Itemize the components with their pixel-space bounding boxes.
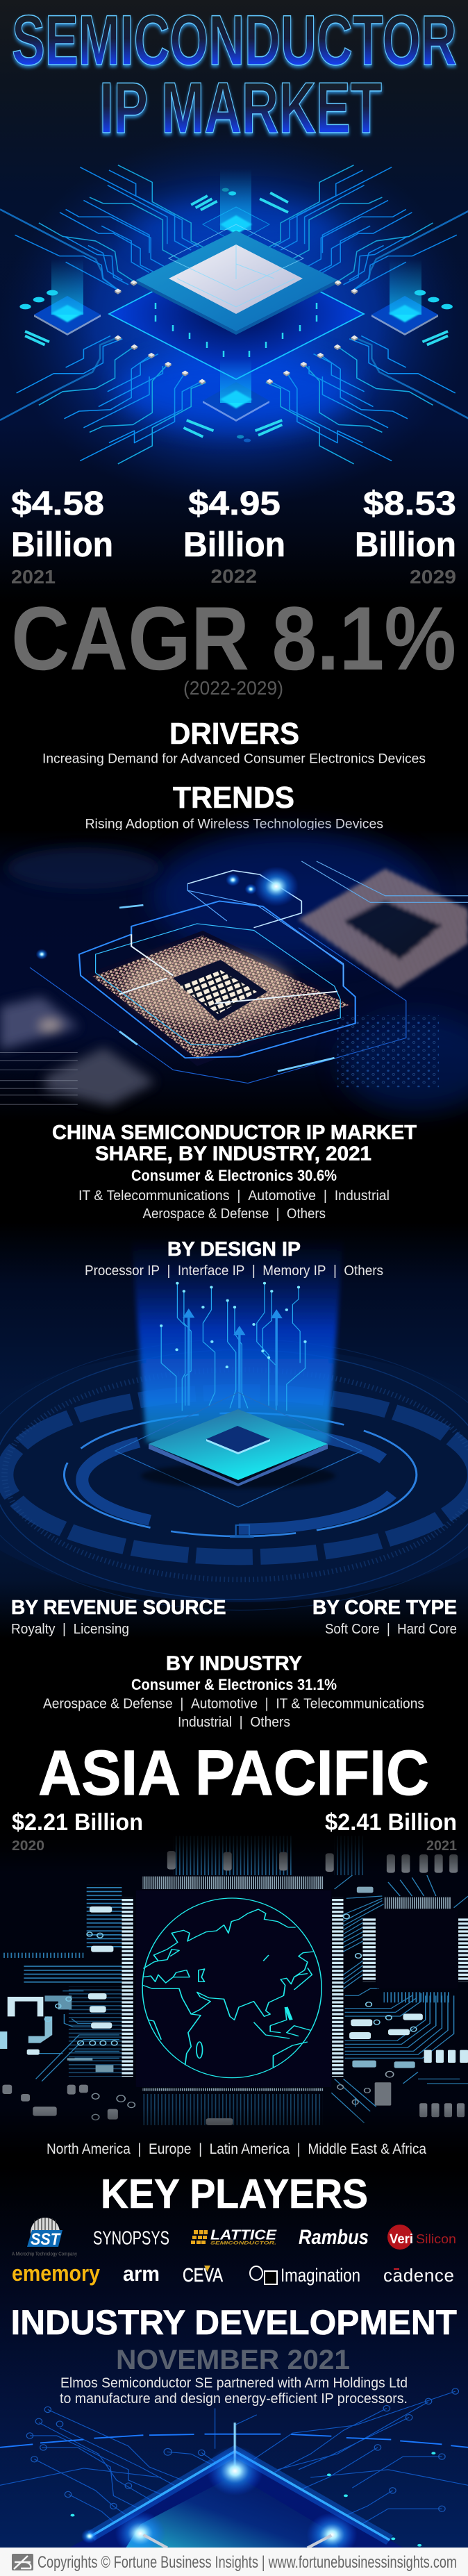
footer [0, 2548, 468, 2576]
market value: 2021: $4.58 [11, 485, 104, 522]
panel: circuit board with globe [0, 1827, 468, 2153]
logo: Lattice [191, 2228, 277, 2246]
logo: SST: A Microchip Technology Company [12, 2250, 77, 2257]
small chip: right [371, 259, 438, 335]
trends: TRENDS [173, 781, 294, 815]
logo: Imagination [250, 2265, 360, 2286]
asia pacific value: 2020: 2020 [12, 1838, 44, 1854]
upward arrows [183, 1308, 283, 1409]
logo: VeriSilicon: Silicon [416, 2232, 456, 2246]
chip body [136, 1891, 331, 2087]
market value: 2022: $4.95 [188, 485, 281, 522]
asia pacific value: 2020 [12, 1809, 143, 1854]
by design IP: Processor IP | Interface IP | Memory IP | Others [85, 1263, 383, 1279]
chart: isometric processor illustration [0, 165, 468, 464]
main processor [83, 931, 358, 1066]
trends: Rising Adoption of Wireless Technologies Devices [85, 817, 383, 832]
asia pacific heading: ASIA PACIFIC [38, 1738, 429, 1809]
panel: processor photo [0, 830, 468, 1122]
development description: Elmos Semiconductor SE partnered with Arm Holdings Ltd [60, 2375, 408, 2391]
logo: Arm: arm [123, 2261, 160, 2286]
light beam [131, 1238, 343, 1443]
china share heading [52, 1122, 417, 1165]
by revenue source: BY REVENUE SOURCE [11, 1597, 226, 1619]
by industry: Industrial | Others [178, 1714, 290, 1730]
chip pins [122, 1877, 468, 2091]
market value: 2021 [11, 485, 113, 588]
blurred chip: right [299, 869, 468, 989]
development description [60, 2375, 408, 2407]
trace nodes [160, 1282, 307, 1368]
market value: 2029 [355, 485, 456, 588]
logo: Rambus: Rambus [299, 2226, 369, 2249]
logo: Lattice: SEMICONDUCTOR. [210, 2242, 277, 2246]
solder rings [44, 1914, 417, 2120]
logo row one [12, 2218, 456, 2257]
logo: eMemory: ememory [12, 2261, 100, 2286]
by industry: Aerospace & Defense | Automotive | IT & Telecommunications [43, 1696, 424, 1711]
by core type: BY CORE TYPE [312, 1597, 457, 1619]
by core type [312, 1597, 457, 1637]
rising data traces [161, 1283, 305, 1411]
circuit traces [0, 165, 468, 464]
small chip: top [203, 169, 269, 243]
panel: hero background [0, 0, 468, 604]
china share list: Aerospace & Defense | Others [143, 1206, 326, 1222]
by revenue source: Royalty | Licensing [11, 1621, 129, 1637]
board fade [0, 1827, 468, 2153]
light flare [36, 867, 439, 1087]
logo: Synopsys: SYNOPSYS [93, 2227, 169, 2249]
asia pacific value: 2021 [325, 1809, 457, 1854]
title [12, 1, 457, 149]
small chip: bottom [203, 358, 269, 422]
market value: 2029: 2029 [410, 566, 456, 588]
by industry: Consumer & Electronics 31.1% [131, 1676, 337, 1693]
asia pacific value: 2021: 2021 [426, 1838, 457, 1854]
logo: Cadence: cadence [383, 2265, 454, 2286]
neon circuit outlines [0, 861, 468, 1104]
other regions: North America | Europe | Latin America | Middle East & Africa [47, 2141, 426, 2157]
cyan sparks [70, 2452, 435, 2547]
logo: Imagination: Imagination [281, 2265, 360, 2286]
globe with Asia outline [142, 1898, 321, 2078]
logo: SST [12, 2218, 77, 2257]
logo: Lattice: LATTICE [210, 2228, 277, 2243]
trends [85, 781, 383, 832]
main chip [136, 224, 337, 335]
central chip [115, 1393, 362, 1507]
asia pacific value: 2020: $2.21 Billion [12, 1809, 143, 1836]
china share list: Consumer & Electronics 30.6% [131, 1167, 337, 1184]
development description: to manufacture and design energy-efficient IP processors. [60, 2391, 408, 2407]
by industry [43, 1653, 424, 1730]
CAGR figure: (2022-2029) [183, 677, 283, 699]
base plate [109, 249, 364, 379]
drivers: Increasing Demand for Advanced Consumer Electronics Devices [42, 751, 426, 767]
small chip: left [34, 259, 101, 335]
market value: 2029: $8.53 [363, 485, 456, 522]
panel: lower background circuit [0, 2167, 468, 2576]
development date: NOVEMBER 2021 [116, 2345, 350, 2375]
logo row two [12, 2261, 454, 2286]
hud rings [0, 1339, 468, 1610]
white pads [115, 280, 358, 385]
logo: CEVA: CEVA [183, 2264, 223, 2286]
by design IP: BY DESIGN IP [167, 1238, 301, 1261]
fan traces [0, 2391, 468, 2525]
glowing socket [0, 2423, 468, 2576]
china share list: IT & Telecommunications | Automotive | Industrial [78, 1188, 390, 1204]
by core type: Soft Core | Hard Core [325, 1621, 457, 1637]
cyan data bars and dots [19, 188, 453, 442]
icon: Fortune Business Insights logo [12, 2554, 33, 2570]
china share list [78, 1167, 390, 1222]
board traces [1, 1836, 468, 2125]
market value: 2029: Billion [355, 525, 456, 564]
logo: VeriSilicon [387, 2225, 456, 2250]
by revenue source [11, 1597, 226, 1637]
market value: 2022: Billion [183, 525, 285, 564]
market value: 2022: 2022 [211, 565, 257, 587]
node rings [26, 2388, 458, 2511]
drivers: DRIVERS [169, 717, 299, 751]
china share heading: CHINA SEMICONDUCTOR IP MARKET [52, 1122, 417, 1144]
ring segments [0, 2434, 468, 2448]
by industry: BY INDUSTRY [166, 1653, 302, 1675]
china share heading: SHARE, BY INDUSTRY, 2021 [95, 1143, 371, 1165]
key players heading: KEY PLAYERS [101, 2171, 368, 2217]
contact ticks [156, 303, 317, 357]
by design IP [85, 1238, 383, 1279]
industry development heading: INDUSTRY DEVELOPMENT [11, 2303, 457, 2342]
blurred chips: left [0, 997, 156, 1106]
drivers [42, 717, 426, 767]
logo: SST: SST [31, 2230, 61, 2249]
market value: 2021: 2021 [11, 566, 56, 588]
board components [0, 1887, 468, 2072]
market value: 2021: Billion [11, 525, 113, 564]
panel: design IP chip illustration [0, 1222, 468, 1639]
asia pacific value: 2021: $2.41 Billion [325, 1809, 457, 1836]
market value: 2022 [183, 485, 285, 587]
logo: VeriSilicon: Veri [390, 2232, 413, 2247]
